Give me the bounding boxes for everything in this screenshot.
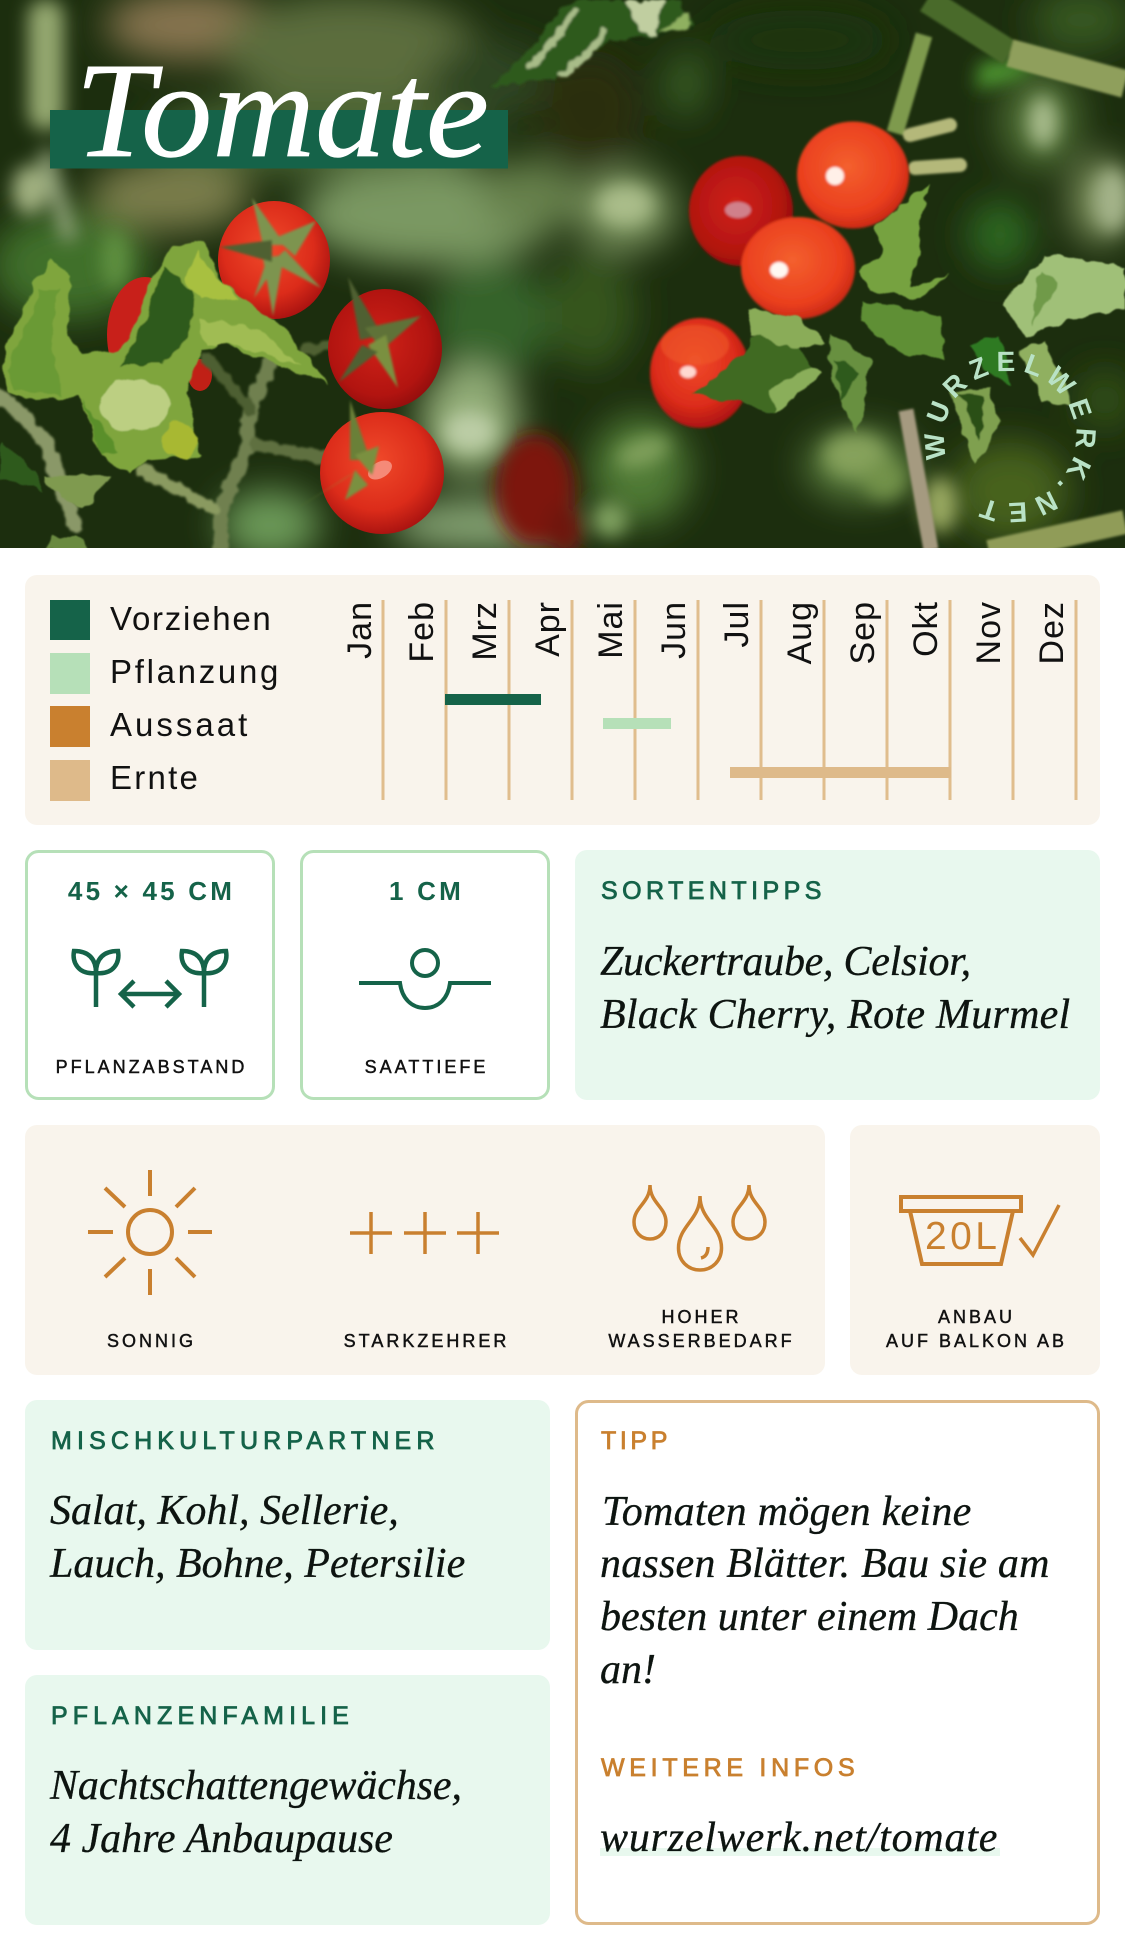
label: balcony (886, 1307, 1067, 1351)
link with highlight: wurzelwerk.net/tomate (600, 1815, 998, 1861)
icon: seed in soil (359, 950, 491, 1008)
tomatoes: left (218, 198, 444, 534)
month grid (341, 600, 1076, 800)
panel: Sortentipps: Zuckertraube, Celsior, (600, 939, 971, 985)
bar: Pflanzung (603, 718, 671, 729)
panel: Tipp: an! (600, 1647, 656, 1693)
tomato: left cluster hidden (107, 277, 152, 354)
right leaves (692, 183, 1125, 463)
label: balcony: AUF BALKON AB (886, 1331, 1067, 1351)
panel: calendar (25, 575, 1100, 825)
panel: Pflanzenfamilie: 4 Jahre Anbaupause (50, 1816, 393, 1862)
legend: Vorziehen (110, 600, 273, 637)
top leaf (489, 0, 692, 88)
panel: Tipp (576, 1402, 1098, 1924)
panel: Sortentipps: SORTENTIPPS (601, 877, 826, 905)
month grid: Apr (529, 601, 567, 657)
panel: Pflanzenfamilie (25, 1675, 550, 1925)
panel: Tipp: Tomaten mögen keine (602, 1489, 971, 1535)
calyx: middle and lower tomato (323, 278, 421, 500)
month grid: Mrz (466, 601, 504, 661)
title bar (50, 110, 508, 168)
panel: Saattiefe: SAATTIEFE (365, 1057, 488, 1077)
label: water demand: HOHER (661, 1307, 742, 1327)
icon: sun (88, 1170, 212, 1295)
panel: Pflanzabstand (26, 852, 274, 1098)
panel: Mischkulturpartner: Lauch, Bohne, Petersilie (49, 1541, 465, 1587)
photo: tomato plant with ripe cherry tomatoes (0, 0, 1125, 548)
month grid: Jun (655, 601, 693, 659)
legend (50, 600, 281, 801)
icon: 20 litre pot with check (901, 1197, 1059, 1264)
legend: Aussaat (110, 706, 250, 743)
bar: Ernte (730, 767, 951, 778)
label: water demand (608, 1307, 795, 1351)
panel: Saattiefe: 1 CM (389, 876, 464, 906)
legend: Pflanzung (110, 653, 281, 690)
icon: two sprouts with arrow (74, 951, 226, 1007)
panel: conditions: SONNIG (107, 1331, 196, 1351)
month grid: Feb (403, 601, 441, 663)
panel: Tipp: TIPP (601, 1427, 671, 1455)
icon: water drops (634, 1185, 765, 1270)
month grid: Jan (341, 601, 379, 659)
legend: Ernte (110, 759, 200, 796)
panel: Mischkulturpartner: Salat, Kohl, Sellerie, (50, 1488, 399, 1534)
calyx: top tomato (220, 198, 321, 316)
panel: conditions (25, 1125, 825, 1375)
icon: three plus signs (350, 1212, 499, 1254)
panel: Saattiefe (302, 852, 548, 1098)
month grid: Sep (844, 601, 882, 664)
tomato stems: left (0, 340, 328, 548)
month grid: Mai (592, 601, 630, 659)
title: Tomate (75, 36, 489, 186)
month grid: Dez (1033, 601, 1071, 664)
panel: Tipp: nassen Blätter. Bau sie am (600, 1541, 1050, 1587)
circular logo text: WURZELWERK.NET (924, 352, 1096, 522)
panel: Tipp: WEITERE INFOS (601, 1754, 859, 1782)
bar: Vorziehen (445, 694, 541, 705)
panel: Sortentipps (575, 850, 1100, 1100)
month grid: Nov (970, 601, 1008, 664)
month grid: Jul (718, 601, 756, 647)
month grid: Okt (907, 601, 945, 657)
panel: Mischkulturpartner (25, 1400, 550, 1650)
panel: Pflanzabstand: 45 × 45 CM (68, 876, 235, 906)
panel: conditions: STARKZEHRER (344, 1331, 509, 1351)
month grid: Aug (781, 601, 819, 664)
panel: Tipp: besten unter einem Dach (600, 1594, 1019, 1640)
label: balcony: ANBAU (938, 1307, 1015, 1327)
icon: 20 litre pot with check: 20L (925, 1215, 997, 1258)
left leaf (0, 242, 329, 550)
panel: balcony (850, 1125, 1100, 1375)
panel: Pflanzabstand: PFLANZABSTAND (56, 1057, 247, 1077)
tomatoes: right cluster (650, 122, 909, 428)
panel: Mischkulturpartner: MISCHKULTURPARTNER (51, 1427, 440, 1455)
panel: Sortentipps: Black Cherry, Rote Murmel (600, 992, 1070, 1038)
panel: Pflanzenfamilie: PFLANZENFAMILIE (51, 1702, 354, 1730)
panel: Pflanzenfamilie: Nachtschattengewächse, (49, 1763, 462, 1809)
label: water demand: WASSERBEDARF (608, 1331, 795, 1351)
